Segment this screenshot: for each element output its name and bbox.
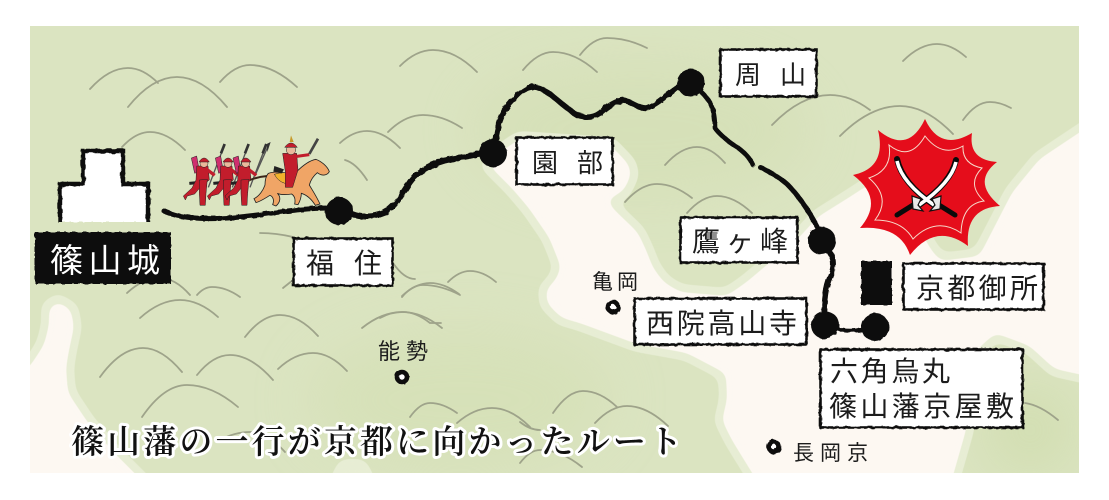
label: 西院高山寺: 西院高山寺 xyxy=(646,308,797,339)
town marker: 長岡京 xyxy=(769,442,779,452)
label: 西院高山寺 xyxy=(634,298,806,344)
label: 京都御所 xyxy=(904,264,1044,310)
icon: battle burst with crossed swords xyxy=(853,119,1000,255)
label: 福住 xyxy=(294,238,392,286)
place name: 能勢: 能勢 xyxy=(378,339,428,364)
label: 福住: 福住 xyxy=(306,248,382,279)
label: 六角烏丸 篠山藩京屋敷 xyxy=(820,350,1022,428)
route stop: 園部 xyxy=(479,139,507,167)
route stop: 福住 xyxy=(325,197,353,225)
place name: 亀岡: 亀岡 xyxy=(592,271,638,294)
town marker: 亀岡 xyxy=(608,302,618,312)
label: 鷹ヶ峰: 鷹ヶ峰 xyxy=(692,226,788,257)
label: 京都御所: 京都御所 xyxy=(916,273,1038,304)
label: 園部 xyxy=(516,138,612,184)
label: 篠山城 xyxy=(35,232,171,284)
label: 周山 xyxy=(720,50,816,96)
place name: 長岡京: 長岡京 xyxy=(793,442,868,465)
icon: Sasayama castle xyxy=(60,151,148,222)
label: 六角烏丸 篠山藩京屋敷: 篠山藩京屋敷 xyxy=(829,391,1014,422)
label: 六角烏丸 篠山藩京屋敷: 六角烏丸 xyxy=(830,356,950,387)
mountain range lines xyxy=(90,38,1058,467)
title: 篠山藩の一行が京都に向かったルート xyxy=(71,424,682,461)
label: 篠山城: 篠山城 xyxy=(50,242,160,279)
route stop: 鷹ヶ峰 xyxy=(808,227,836,255)
marching procession of soldiers and horseman xyxy=(183,135,329,206)
icon: Kyoto Imperial Palace block xyxy=(861,261,892,305)
route stop: 六角烏丸 xyxy=(861,313,889,341)
route stop: 西院高山寺 xyxy=(811,311,839,339)
label: 鷹ヶ峰 xyxy=(680,218,798,262)
route stop: 周山 xyxy=(677,69,705,97)
label: 園部: 園部 xyxy=(532,148,603,178)
route line xyxy=(164,69,889,341)
label: 周山: 周山 xyxy=(735,60,806,90)
town marker: 能勢 xyxy=(397,372,407,382)
